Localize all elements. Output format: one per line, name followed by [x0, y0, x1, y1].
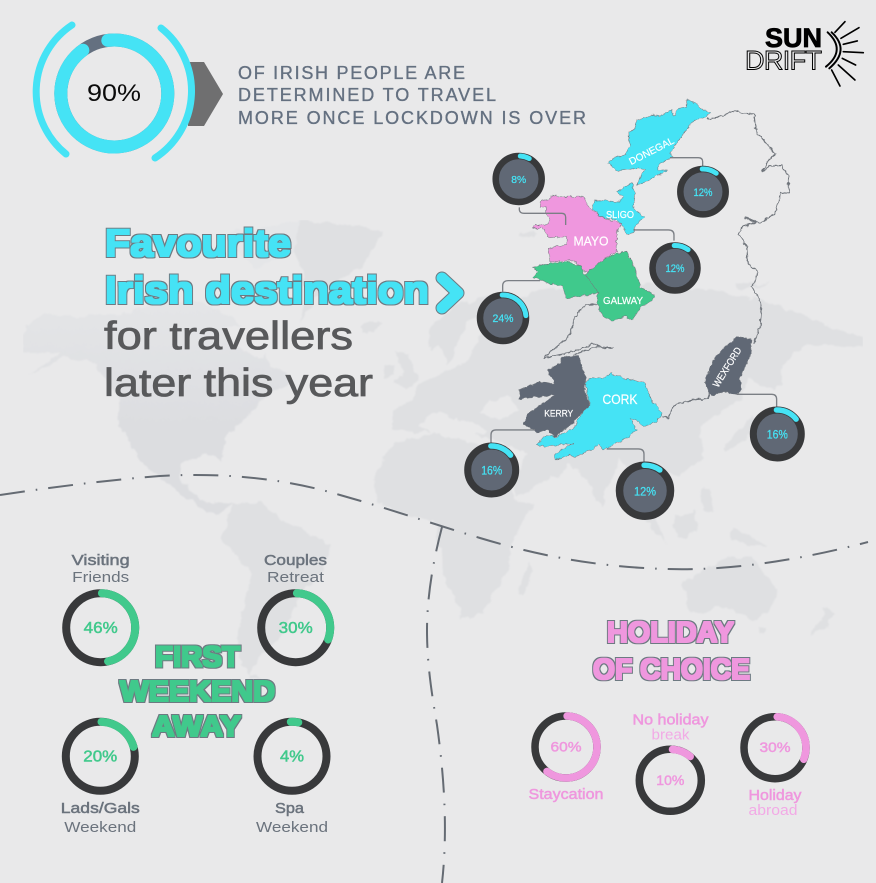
donut: lads/gals weekend 20% — [61, 721, 140, 836]
donut: holiday abroad 30%: abroad — [748, 802, 798, 819]
donut: couples retreat 30%: Retreat — [267, 569, 325, 586]
donut: spa weekend 4% — [256, 721, 328, 836]
logo: Sun Drift — [745, 22, 863, 86]
county: Wexford — [704, 337, 752, 397]
heading: favourite Irish destination: Favourite — [105, 223, 291, 265]
county labels: CORK — [602, 391, 638, 407]
county labels: WEXFORD — [711, 346, 744, 390]
outer arc left — [36, 25, 72, 154]
donut: no holiday break 10%: 10% — [656, 772, 684, 788]
county labels — [544, 136, 744, 420]
donut: couples retreat 30%: Couples — [264, 552, 327, 569]
county labels: DONEGAL — [628, 136, 677, 168]
gauge: Sligo 12% — [652, 245, 698, 291]
county: Galway — [585, 252, 654, 321]
donut: lads/gals weekend 20%: Lads/Gals — [61, 800, 140, 817]
heading: favourite Irish destination: for travellers — [104, 315, 353, 358]
heading: favourite Irish destination — [104, 223, 429, 405]
county: Cork — [536, 373, 662, 460]
donut: visiting friends 46%: 46% — [84, 620, 118, 637]
donut: couples retreat 30%: 30% — [279, 620, 313, 637]
donut ring — [61, 40, 168, 147]
arrow: grey hexagon pointer — [188, 62, 223, 126]
donut: no holiday break 10% — [632, 712, 709, 813]
text block: lockdown statement: OF IRISH PEOPLE ARE — [238, 63, 465, 83]
county labels: MAYO — [574, 234, 608, 248]
map: Ireland — [519, 99, 789, 460]
gauge: Kerry 16%: 16% — [481, 466, 502, 478]
donut: visiting friends 46% — [65, 552, 136, 663]
logo: Sun Drift: DRIFT — [745, 46, 822, 76]
gauge: Donegal 12% — [680, 168, 726, 215]
connector lines — [491, 158, 777, 462]
donut: lads/gals weekend 20%: 20% — [83, 748, 118, 766]
donut: holiday abroad 30%: Holiday — [748, 787, 802, 804]
donut: couples retreat 30% — [260, 552, 331, 663]
county labels: SLIGO — [606, 209, 634, 221]
coastline outlines — [519, 99, 789, 460]
gauge: Cork 12%: 12% — [634, 484, 656, 498]
gauge: Donegal 12%: 12% — [694, 187, 713, 199]
heading: holiday of choice — [593, 617, 750, 686]
gauge: Wexford 16%: 16% — [767, 430, 788, 442]
donut: lads/gals weekend 20%: Weekend — [64, 819, 136, 836]
donut: no holiday break 10%: No holiday — [632, 712, 709, 728]
donut: visiting friends 46%: Visiting — [72, 552, 130, 569]
heading: favourite Irish destination: Irish destination — [105, 270, 429, 312]
logo: Sun Drift: SUN — [765, 23, 822, 53]
heading: first weekend away: FIRST — [155, 642, 240, 674]
heading: holiday of choice: OF CHOICE — [593, 654, 750, 686]
dash-dot divider: horizontal curve — [0, 475, 868, 569]
county: Sligo — [592, 183, 644, 234]
gauge: Sligo-side 8%: 8% — [511, 174, 526, 186]
county: Kerry — [519, 356, 590, 437]
county labels: KERRY — [544, 408, 574, 420]
dash-dot divider: vertical curve — [427, 527, 445, 883]
outer arc right — [155, 28, 192, 158]
gauge: Wexford 16% — [752, 409, 802, 459]
donut: spa weekend 4%: Spa — [275, 800, 305, 817]
text block: lockdown statement: DETERMINED TO TRAVEL — [238, 85, 496, 105]
gauge: Galway 24%: 24% — [492, 313, 514, 325]
donut: holiday abroad 30% — [742, 715, 808, 819]
text block: lockdown statement — [238, 63, 586, 128]
value: 90% — [87, 80, 141, 107]
donut: staycation 60% — [528, 715, 604, 803]
heading: first weekend away — [120, 642, 275, 743]
gauge: Sligo 12%: 12% — [666, 263, 685, 275]
donut: staycation 60%: Staycation — [528, 786, 604, 803]
donut: spa weekend 4%: Weekend — [256, 819, 328, 836]
donut: visiting friends 46%: Friends — [72, 569, 129, 586]
heading: first weekend away: AWAY — [152, 711, 241, 743]
heading: favourite Irish destination: later this year — [104, 362, 373, 405]
donut: no holiday break 10%: break — [652, 728, 690, 744]
county: Donegal — [608, 99, 711, 185]
donut: staycation 60%: 60% — [550, 738, 582, 754]
gauge: Galway 24% — [479, 294, 527, 342]
stat: 90% donut — [36, 25, 223, 158]
world map background — [23, 220, 863, 680]
text block: lockdown statement: MORE ONCE LOCKDOWN IS OVER — [238, 108, 586, 128]
heading: holiday of choice: HOLIDAY — [607, 617, 734, 649]
heading: first weekend away: WEEKEND — [120, 676, 275, 708]
icon: chevron arrow — [442, 278, 458, 308]
county labels: GALWAY — [603, 296, 643, 307]
donut: holiday abroad 30%: 30% — [760, 739, 790, 755]
county: Mayo — [532, 195, 622, 274]
gauge: Cork 12% — [619, 464, 671, 517]
gauge: Kerry 16% — [467, 445, 517, 495]
gauge: Sligo-side 8% — [494, 154, 543, 204]
donut: spa weekend 4%: 4% — [280, 748, 304, 766]
